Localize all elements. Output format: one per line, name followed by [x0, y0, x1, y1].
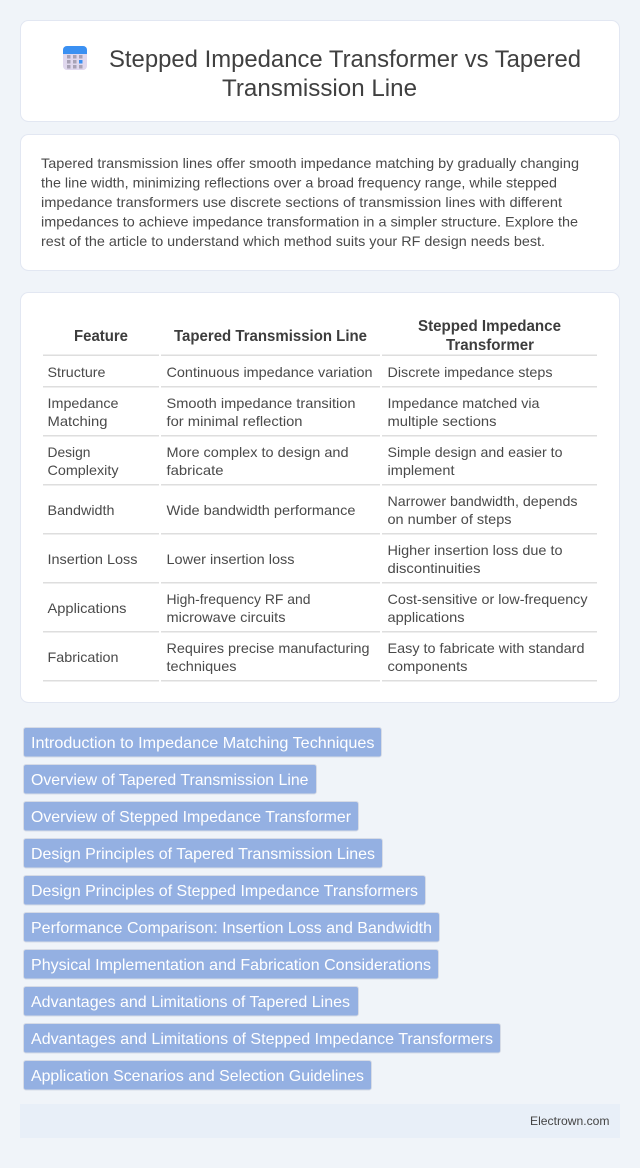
- table row: structure: [48, 364, 552, 380]
- panel: introduction: [20, 134, 620, 270]
- link: design stepped: [24, 876, 426, 905]
- link: advantages stepped: [24, 1024, 500, 1053]
- table row: bandwidth: Narrower bandwidth, depends: [388, 493, 578, 509]
- link: advantages tapered: [24, 986, 358, 1016]
- table row: impedance matching: Smooth impedance transition: [166, 395, 356, 411]
- text block: intro paragraph: impedance transformers use discrete sections of transmission lines with different: [41, 194, 562, 210]
- table row: impedance matching: Impedance matched via: [388, 395, 540, 411]
- table row: design complexity: More complex to design and: [166, 444, 348, 460]
- table row: applications: [48, 591, 588, 625]
- table row: insertion loss: Insertion Loss: [48, 551, 138, 567]
- table row: structure: Discrete impedance steps: [388, 364, 552, 380]
- text block: intro paragraph: impedances to achieve impedance transformation in a simpler structure. Explore the: [41, 214, 578, 230]
- link: design tapered: Design Principles of Tapered Transmission Lines: [31, 846, 375, 863]
- link: design stepped: Design Principles of Stepped Impedance Transformers: [31, 883, 418, 900]
- table row: design complexity: fabricate: [166, 462, 224, 478]
- table row: design complexity: [48, 444, 563, 478]
- link: application scenarios: [24, 1060, 372, 1090]
- table header row: Stepped Impedance: [418, 318, 561, 335]
- table row: fabrication: techniques: [166, 658, 236, 674]
- table header row: Transformer: [446, 337, 534, 354]
- table row: impedance matching: Impedance: [48, 395, 119, 411]
- link: physical implementation: [24, 950, 438, 979]
- table row: insertion loss: Lower insertion loss: [166, 551, 294, 567]
- link: overview stepped: Overview of Stepped Impedance Transformer: [31, 809, 352, 826]
- table header row: Feature: [74, 328, 128, 345]
- footer: [20, 1104, 620, 1138]
- table row: structure: Continuous impedance variation: [166, 364, 372, 380]
- title: Stepped Impedance Transformer vs Tapered: [109, 46, 581, 73]
- table row: applications: Applications: [48, 600, 126, 616]
- table row: insertion loss: discontinuities: [388, 560, 480, 576]
- link: overview stepped: [24, 802, 358, 831]
- icon: calendar: [63, 46, 87, 70]
- table row: design complexity: Design: [48, 444, 90, 460]
- table row: fabrication: [48, 640, 584, 674]
- table row: fabrication: Requires precise manufacturing: [166, 640, 370, 656]
- table row: impedance matching: for minimal reflection: [166, 413, 302, 429]
- table row: bandwidth: Wide bandwidth performance: [166, 502, 356, 518]
- table row: applications: Cost-sensitive or low-frequency: [388, 591, 588, 607]
- link: performance comparison: [24, 912, 440, 942]
- title: Transmission Line: [222, 75, 417, 102]
- table row: bandwidth: [48, 493, 578, 527]
- table row: impedance matching: [48, 395, 540, 429]
- table header row: [74, 318, 561, 354]
- text block: intro paragraph: [41, 155, 579, 249]
- link: design tapered: [24, 838, 382, 868]
- title: [109, 46, 581, 102]
- table row: structure: Structure: [48, 364, 106, 380]
- table row: bandwidth: on number of steps: [388, 511, 512, 527]
- link: overview tapered: [24, 764, 316, 794]
- table row: insertion loss: [48, 542, 563, 576]
- panel: comparison table: [20, 292, 620, 702]
- table row: design complexity: Complexity: [48, 462, 118, 478]
- link: performance comparison: Performance Comparison: Insertion Loss and Bandwidth: [31, 920, 432, 937]
- link: overview tapered: Overview of Tapered Transmission Line: [31, 772, 309, 789]
- table row: design complexity: implement: [388, 462, 455, 478]
- table row: insertion loss: Higher insertion loss due to: [388, 542, 563, 558]
- table row: fabrication: Easy to fabricate with standard: [388, 640, 584, 656]
- text block: intro paragraph: Tapered transmission lines offer smooth impedance matching by gradually changing: [41, 155, 579, 171]
- link: application scenarios: Application Scenarios and Selection Guidelines: [31, 1068, 364, 1085]
- table row: applications: applications: [388, 609, 464, 625]
- panel: table of contents links: [24, 728, 500, 1090]
- link: introduction: Introduction to Impedance Matching Techniques: [31, 735, 374, 752]
- link: physical implementation: Physical Implementation and Fabrication Considerations: [31, 957, 431, 974]
- text block: intro paragraph: rest of the article to understand which method suits your RF design needs best.: [41, 233, 545, 249]
- table row: bandwidth: Bandwidth: [48, 502, 114, 518]
- table row: applications: High-frequency RF and: [166, 591, 310, 607]
- link: advantages tapered: Advantages and Limitations of Tapered Lines: [31, 994, 350, 1011]
- table row: fabrication: Fabrication: [48, 649, 118, 665]
- footer: Electrown.com: [530, 1114, 610, 1128]
- table row: impedance matching: Matching: [48, 413, 108, 429]
- table row: fabrication: components: [388, 658, 468, 674]
- table row: impedance matching: multiple sections: [388, 413, 496, 429]
- table header row: Tapered Transmission Line: [174, 328, 367, 345]
- link: introduction: [24, 728, 382, 757]
- text block: intro paragraph: the line width, minimizing reflections over a broad frequency range, while stepped: [41, 174, 557, 190]
- link: advantages stepped: Advantages and Limitations of Stepped Impedance Transformers: [31, 1031, 493, 1048]
- table row: applications: microwave circuits: [166, 609, 286, 625]
- table row: design complexity: Simple design and easier to: [388, 444, 563, 460]
- panel: header: [20, 20, 620, 122]
